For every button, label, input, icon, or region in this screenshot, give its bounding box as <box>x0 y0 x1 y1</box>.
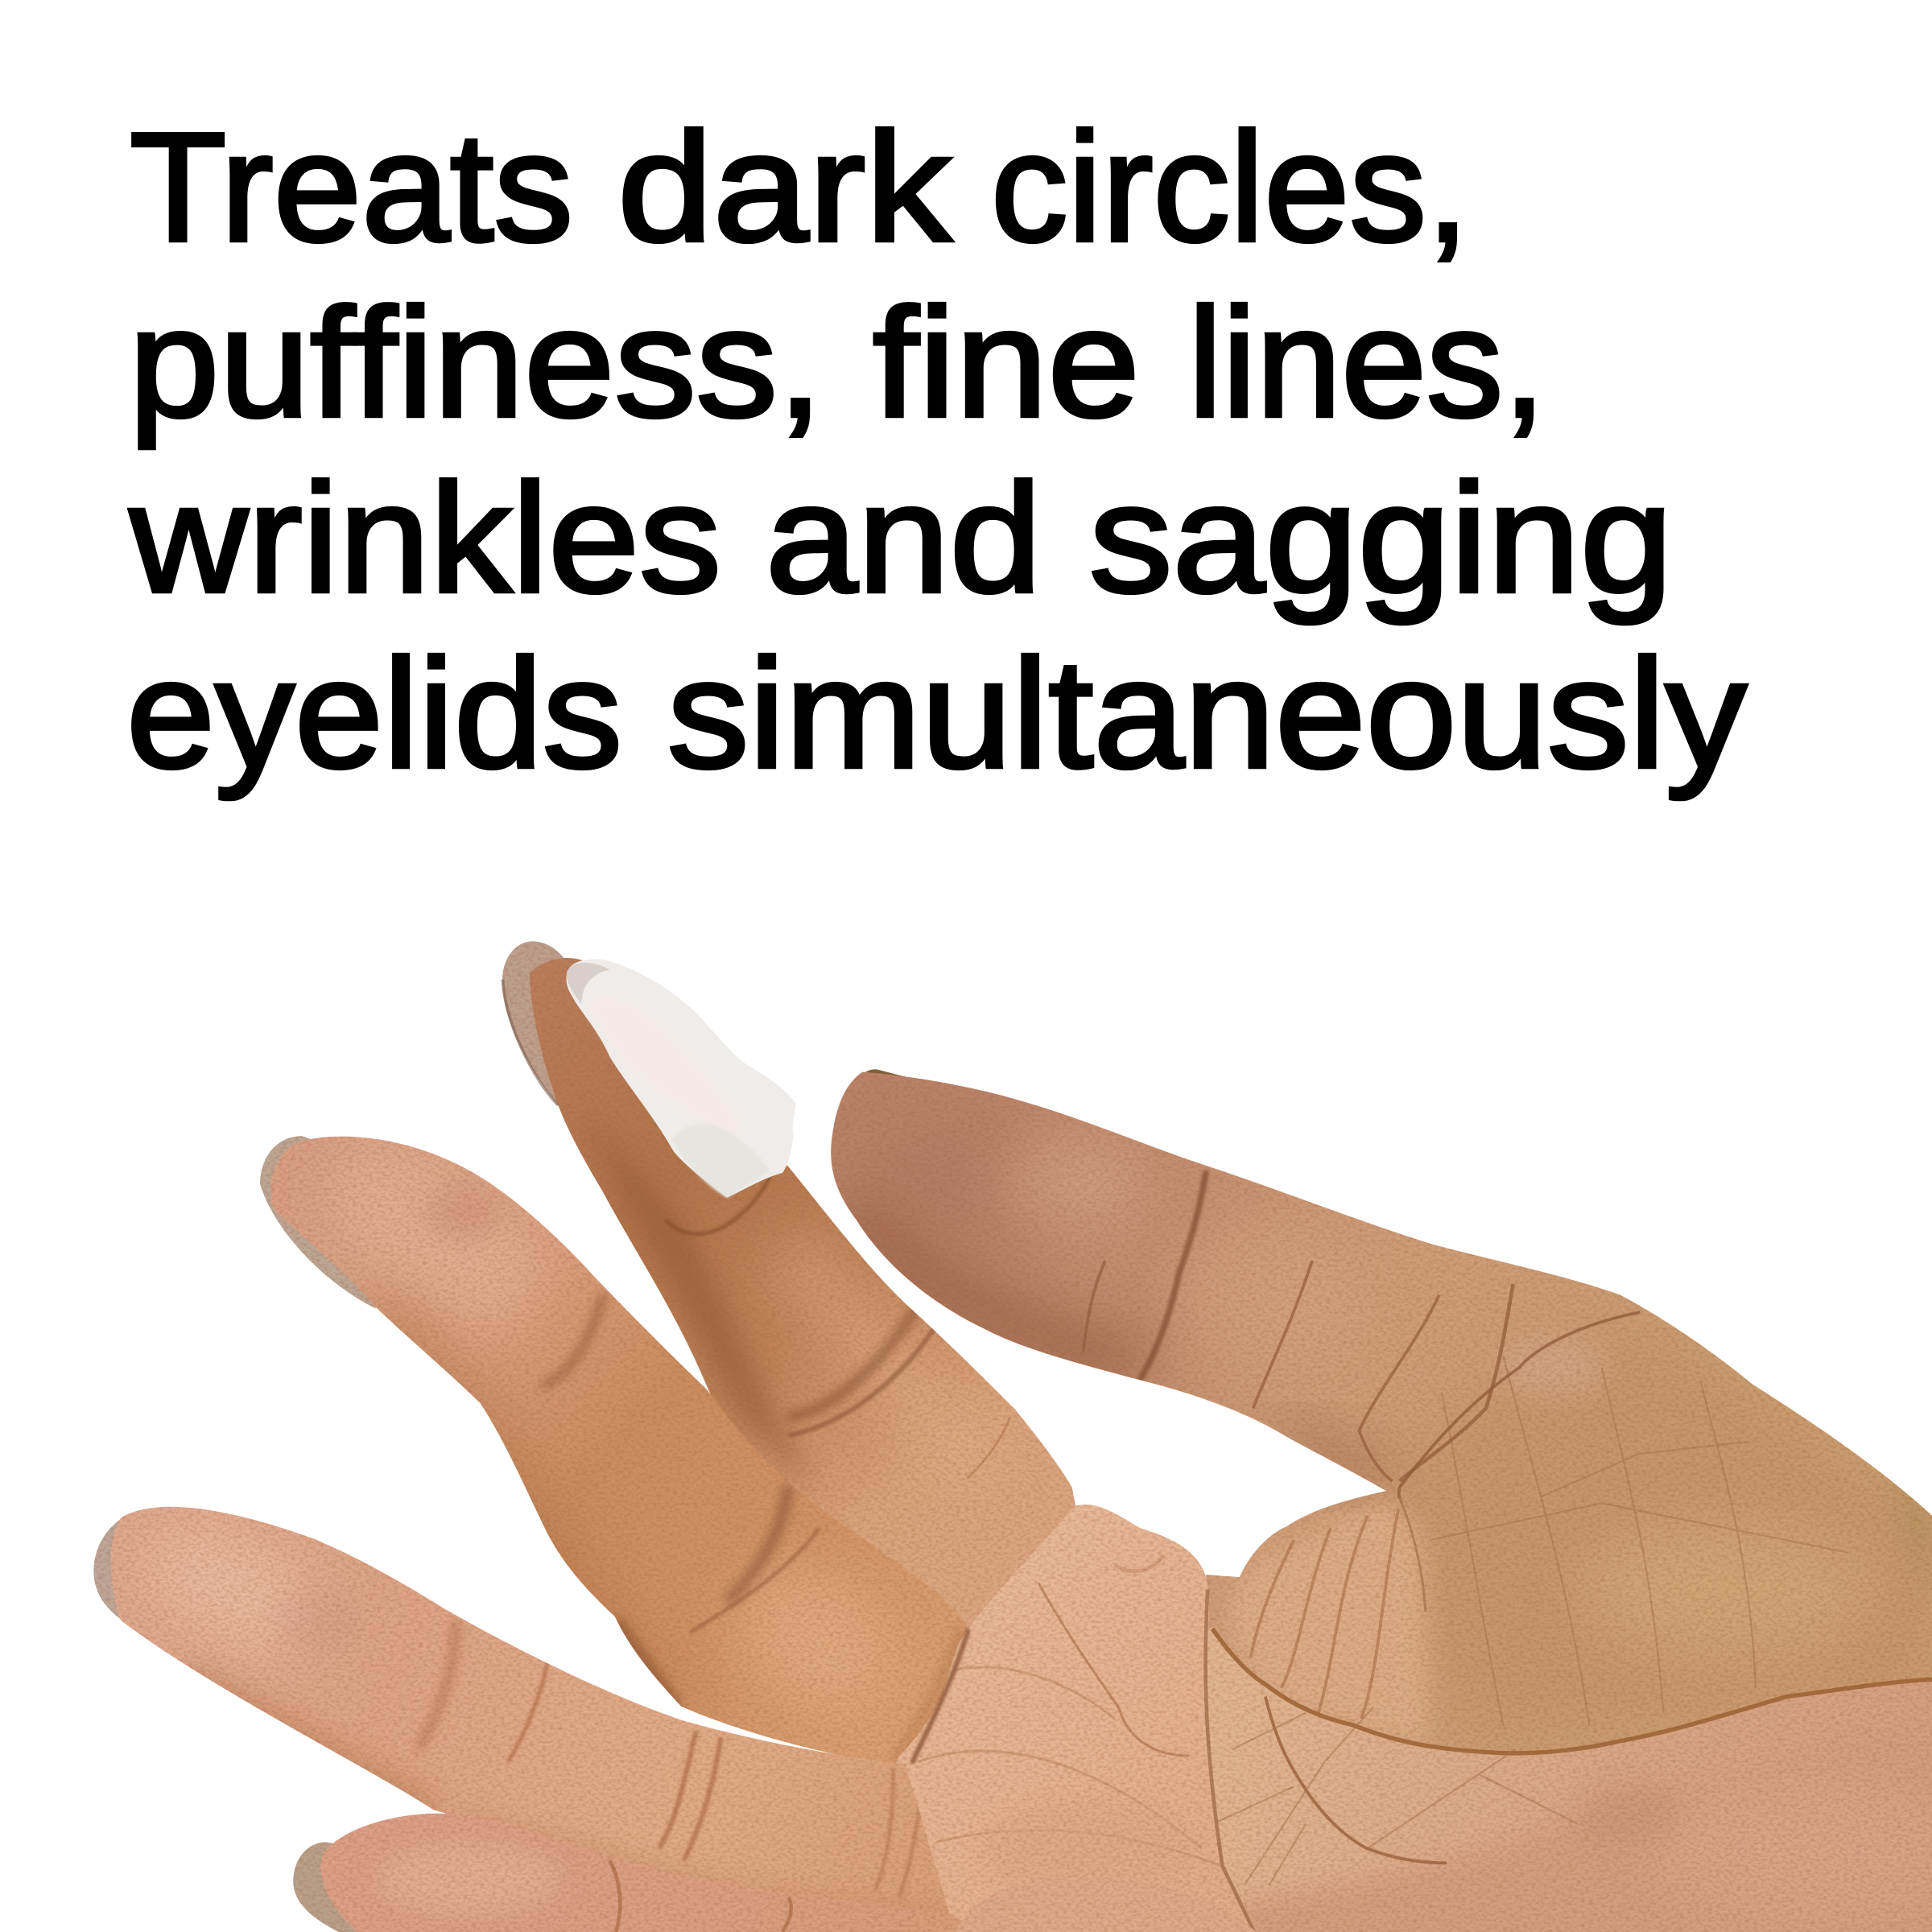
title: dark <box>617 100 952 274</box>
fingernail: bottom finger <box>293 1842 369 1932</box>
thumb base fold <box>1228 1497 1429 1749</box>
title: puffiness, <box>129 275 823 449</box>
title <box>126 100 1748 800</box>
title: simultaneously <box>667 626 1748 800</box>
life line <box>1212 1629 1932 1753</box>
bottom finger <box>293 1814 985 1932</box>
palm mound at finger base <box>887 1505 1257 1932</box>
title: fine <box>873 275 1140 449</box>
title: lines, <box>1188 275 1546 449</box>
palm minor creases <box>1214 1356 1848 1885</box>
hand illustration <box>93 941 1932 1932</box>
fingernail: middle finger <box>502 941 604 1115</box>
title: circles, <box>991 100 1469 274</box>
thumb nail tip <box>852 1069 906 1094</box>
fingernail: lower-left finger <box>93 1509 167 1639</box>
title: and <box>766 451 1042 625</box>
lower palm mound <box>955 1878 1257 1932</box>
lower-left finger <box>93 1497 955 1932</box>
cream dollop <box>567 960 796 1198</box>
thumb and palm <box>831 1069 1932 1932</box>
middle finger <box>502 941 1075 1629</box>
second finger <box>260 1109 968 1765</box>
title: eyelids <box>126 626 622 800</box>
palm heel shading <box>1435 1342 1869 1645</box>
fingernail: second finger <box>260 1136 376 1308</box>
title: Treats <box>130 100 573 274</box>
lower palm <box>1201 1627 1932 1911</box>
title: wrinkles <box>129 451 721 625</box>
head line <box>1265 1697 1447 1863</box>
title: sagging <box>1089 451 1673 625</box>
thumb creases <box>1140 1170 1206 1380</box>
